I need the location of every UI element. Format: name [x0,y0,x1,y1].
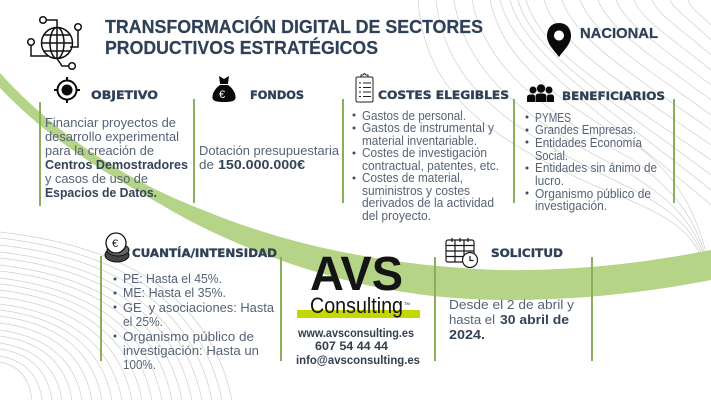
beneficiarios list: PYMES [535,111,571,125]
heading: solicitud: SOLICITUD [491,246,563,260]
costes list: material inventariable. [362,134,477,148]
contact details: 607 54 44 44 [315,341,389,353]
solicitud text [449,298,575,342]
objetivo text: desarrollo experimental [45,130,179,144]
scope label: nacional: NACIONAL [580,25,658,42]
beneficiarios list: Grandes Empresas. [535,123,636,137]
fondos text: 150.000.000€ [218,158,305,172]
cuantia list: GE y asociaciones: Hasta [123,301,274,315]
panel: objetivo [40,77,188,206]
logo: AVS Consulting [297,248,420,318]
beneficiarios list: Organismo público de [535,187,651,201]
icon: people group [527,84,554,102]
beneficiarios list: Social. [535,149,568,163]
title: TRANSFORMACIÓN DIGITAL DE SECTORES [105,16,483,37]
fondos text: de [199,158,214,172]
panel: costes elegibles [343,74,514,223]
contact details [296,328,420,367]
costes list: Costes de material, [362,171,463,185]
cuantia list: el 25%. [123,315,163,329]
cuantia list: Organismo público de [123,330,254,344]
title [105,16,483,58]
fondos text [199,144,339,172]
contact details: info@avsconsulting.es [296,355,420,367]
costes list [352,109,499,223]
objetivo text [45,116,188,200]
solicitud text: 30 abril de [500,313,569,327]
icon: target [54,77,80,103]
logo: AVS Consulting: Consulting [310,293,403,318]
costes list: Gastos de instrumental y [362,121,495,135]
panel: fondos [194,76,339,203]
logo: AVS Consulting: AVS [310,248,403,301]
icon: euro coins [105,233,129,262]
objetivo text: Financiar proyectos de [45,116,176,130]
objetivo text: para la creación de [45,144,154,158]
icon: calendar and clock [446,238,478,268]
cuantia list: ME: Hasta el 35%. [123,286,226,300]
beneficiarios list: investigación. [535,199,607,213]
cuantia list: investigación: Hasta un [123,344,259,358]
costes list: del proyecto. [362,209,431,223]
icon: location pin [547,23,571,57]
solicitud text: Desde el 2 de abril y [449,298,575,312]
heading: cuantia/intensidad: CUANTÍA/INTENSIDAD [132,245,277,260]
objetivo text: Espacios de Datos. [45,186,157,200]
costes list: Costes de investigación [362,146,487,160]
costes list: derivados de la actividad [362,196,494,210]
costes list: contractual, patentes, etc. [362,159,499,173]
heading: objetivo: OBJETIVO [91,88,158,102]
cuantia list [114,272,274,372]
panel: cuantia / intensidad [101,233,592,372]
panel: beneficiarios [526,84,674,213]
icon: clipboard [356,74,373,102]
solicitud text: hasta el [449,313,495,327]
costes list: suministros y costes [362,184,470,198]
green swoosh band [0,73,711,300]
title: PRODUCTIVOS ESTRATÉGICOS [105,37,378,58]
heading: fondos: FONDOS [250,88,304,102]
objetivo text: y casos de uso de [45,172,148,186]
cuantia list: 100%. [123,358,156,372]
solicitud text: 2024. [449,328,485,342]
icon: money bag [212,76,236,102]
logo: AVS Consulting: TM [404,301,410,306]
beneficiarios list: lucro. [535,174,564,188]
heading: costes elegibles: COSTES ELEGIBLES [378,88,509,102]
cuantia list: PE: Hasta el 45%. [123,272,222,286]
contact details: www.avsconsulting.es [297,328,414,340]
costes list: Gastos de personal. [362,109,466,123]
icon: digital globe network [28,17,81,69]
beneficiarios list: Entidades Economía [535,136,642,150]
beneficiarios list: Entidades sin ánimo de [535,161,657,175]
heading: beneficiarios: BENEFICIARIOS [562,89,665,103]
fondos text: Dotación presupuestaria [199,144,339,158]
icon: euro coins: € [112,238,118,250]
objetivo text: Centros Demostradores [45,158,188,172]
panel: solicitud [435,238,592,361]
beneficiarios list [526,111,657,213]
icon: money bag: € [219,89,225,101]
